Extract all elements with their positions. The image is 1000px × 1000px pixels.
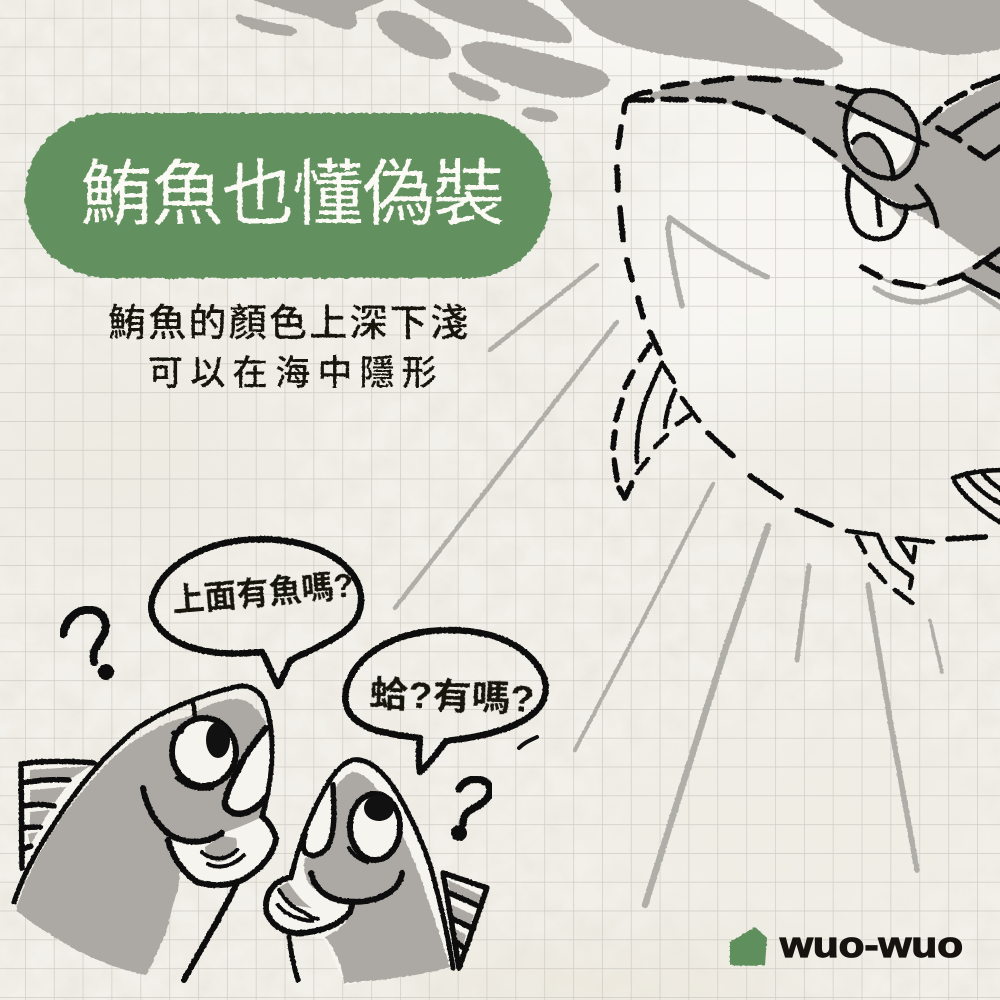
right fish pupil [364, 795, 394, 821]
subtitle line 1: 鮪魚的顏色上深下淺 [108, 303, 468, 345]
pill background [25, 113, 551, 278]
bubble outline [345, 630, 546, 772]
tuna tongue / jaw [844, 167, 937, 239]
title text: 鮪魚也懂偽裝 [81, 155, 505, 235]
question mark left [63, 610, 114, 680]
left fish face white parts [225, 728, 272, 814]
subtitle text [108, 303, 468, 393]
tuna lower gray band [875, 240, 1000, 300]
left fish tail fin [21, 761, 94, 868]
logo green house icon [730, 927, 767, 966]
subtitle line 2: 可以在海中隱形 [148, 354, 437, 393]
logo: wuo-wuo [730, 924, 963, 966]
left fish pupil [206, 722, 230, 758]
tuna gray head fill [650, 76, 1000, 256]
logo wordmark: wuo-wuo [779, 924, 963, 965]
fish right [266, 760, 487, 985]
question mark right [451, 779, 490, 841]
bubble outline [151, 539, 361, 686]
left fish outline [14, 686, 276, 980]
right fish tail fin [443, 873, 487, 968]
tuna dashed outline strokes [613, 75, 1000, 603]
tuna eye [837, 91, 927, 183]
bubble text: 上面有魚嗎? [170, 566, 355, 619]
left fish body fill [16, 699, 271, 975]
right fish outline [266, 760, 453, 980]
speech bubble: 蛤?有嗎? [345, 630, 546, 772]
bubble accent tick [519, 737, 537, 748]
bubble text: 蛤?有嗎? [369, 673, 535, 720]
gray light rays [395, 265, 942, 905]
speech bubble: 上面有魚嗎? [151, 539, 361, 686]
title pill [25, 113, 551, 278]
fish left [14, 686, 276, 980]
right fish lip [266, 878, 352, 933]
right fish white head [290, 760, 452, 985]
top shadow shapes: fish school silhouettes [236, 0, 1000, 122]
gray fin and shading strokes [668, 218, 1000, 311]
tuna belly fin [953, 470, 1000, 525]
right fish body fill [304, 772, 450, 983]
large tuna seen from below, dashed outline [613, 75, 1000, 603]
